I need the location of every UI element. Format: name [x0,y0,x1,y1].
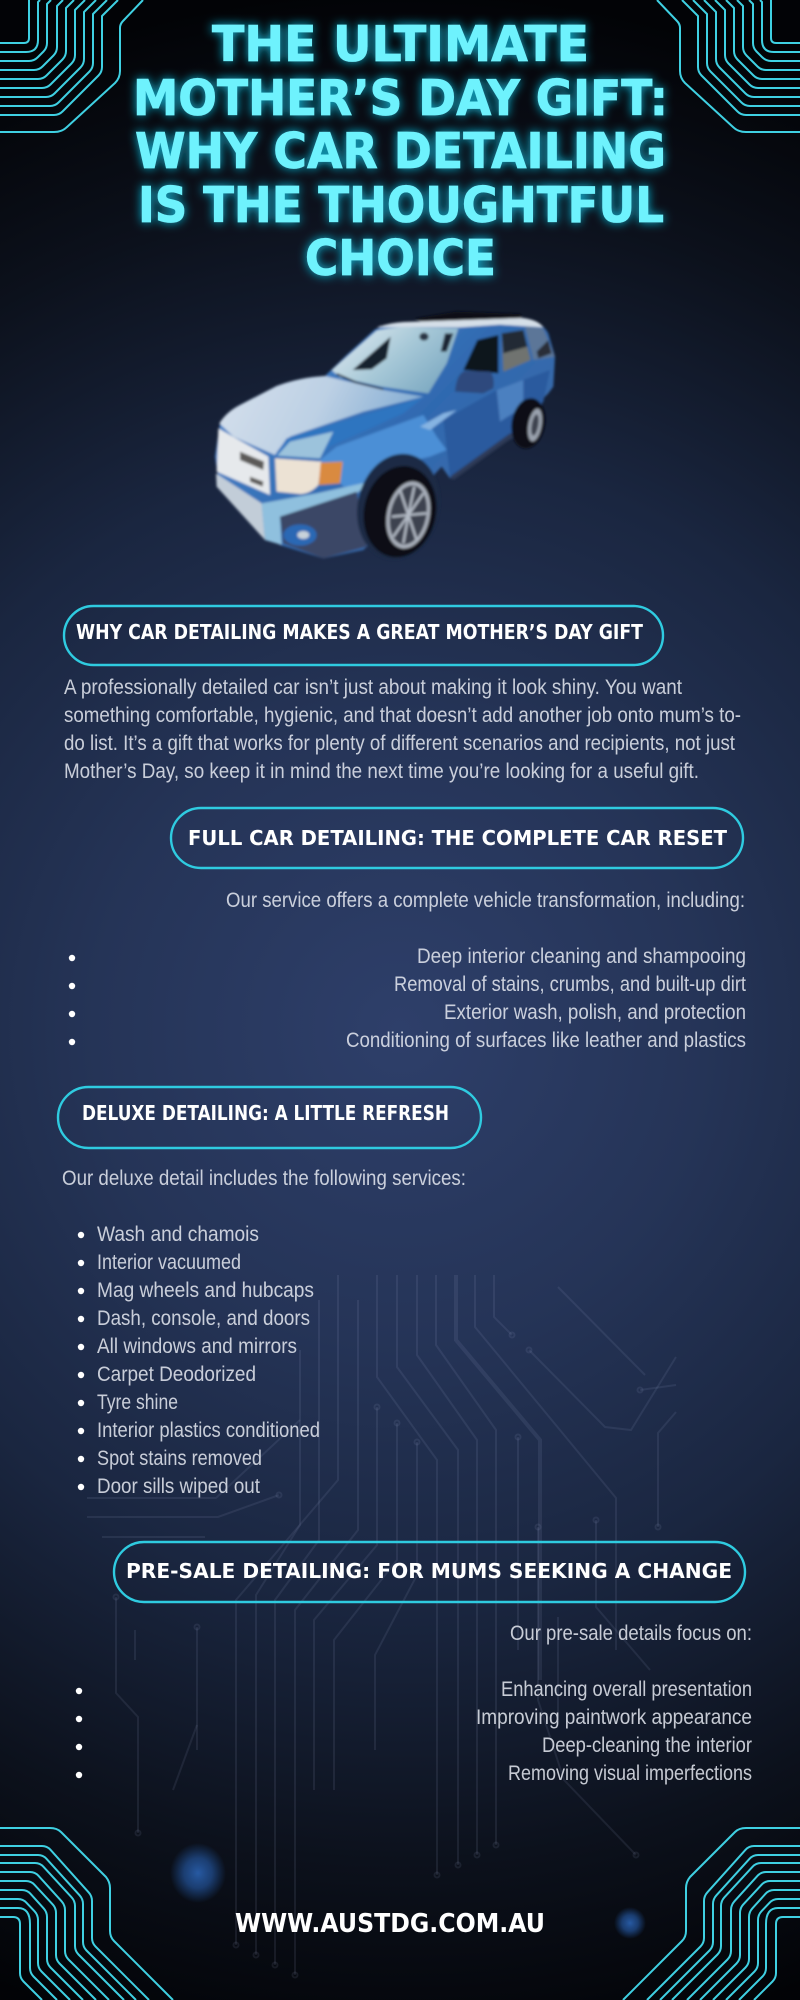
title: CHOICE [305,230,496,287]
bullet list: Tyre shine [97,1391,178,1414]
heading pill: pre-sale detailing [114,1542,745,1602]
fender [320,415,447,487]
section: why car detailing [64,606,741,783]
heading pill: deluxe detailing: DELUXE DETAILING: A LITTLE REFRESH [82,1101,449,1125]
bullet list: All windows and mirrors [97,1335,297,1358]
heading pill: why car detailing [64,606,663,665]
side windows [463,335,498,373]
grille [217,428,270,495]
glowing blue orb left [170,1843,226,1903]
heading pill: full car detailing [171,808,743,868]
circuit board background pattern [87,1275,676,1978]
section: deluxe detailing [58,1087,481,1498]
paragraph [64,676,741,783]
bullet list: Exterior wash, polish, and protection [444,1001,746,1024]
circuit corner bottom left [0,1828,173,2000]
heading pill: why car detailing: WHY CAR DETAILING MAKES A GREAT MOTHER’S DAY GIFT [76,620,643,644]
bullet list: Dash, console, and doors [97,1307,310,1330]
bullet list: Wash and chamois [97,1223,259,1246]
heading pill: deluxe detailing [58,1087,481,1148]
headlight [275,458,322,494]
paragraph: Mother’s Day, so keep it in mind the next time you’re looking for a useful gift. [64,760,699,783]
bullet list: Interior vacuumed [97,1251,241,1274]
circuit corner top left [0,0,143,132]
intro text: Our deluxe detail includes the following services: [62,1167,466,1190]
bullet list: Enhancing overall presentation [501,1678,752,1701]
section: pre-sale detailing [76,1542,752,1785]
bullet list: Deep interior cleaning and shampooing [417,945,746,968]
bullet list: Door sills wiped out [97,1475,260,1498]
title: THE ULTIMATE [212,16,589,73]
bullet list: Carpet Deodorized [97,1363,256,1386]
door side panel shade [443,370,550,477]
circuit corner bottom right [623,1828,800,2000]
section: full car detailing [69,808,746,1052]
bullet list [76,1678,752,1785]
car body [215,318,555,558]
bumper [216,473,265,540]
bullet list [69,945,746,1052]
bullet list: Spot stains removed [97,1447,262,1470]
bullet list: Conditioning of surfaces like leather and plastics [346,1029,746,1052]
website url footer: WWW.AUSTDG.COM.AU [235,1909,545,1939]
circuit corner top right [657,0,800,132]
bullet list: Mag wheels and hubcaps [97,1279,314,1302]
rear wheel [508,395,549,451]
paragraph: A professionally detailed car isn’t just about making it look shiny. You want [64,676,682,699]
title: WHY CAR DETAILING [135,123,666,180]
heading pill: full car detailing: FULL CAR DETAILING: THE COMPLETE CAR RESET [188,826,727,850]
title: IS THE THOUGHTFUL [138,177,664,234]
bullet list [78,1223,320,1498]
title [133,16,668,287]
title: MOTHER’S DAY GIFT: [133,70,668,127]
intro text: Our pre-sale details focus on: [510,1622,752,1645]
roof rack [415,312,523,323]
heading pill: pre-sale detailing: PRE-SALE DETAILING: FOR MUMS SEEKING A CHANGE [126,1559,732,1583]
bullet list: Deep-cleaning the interior [542,1734,752,1757]
front wheel [347,446,449,567]
paragraph: do list. It’s a gift that works for plenty of different scenarios and recipients, not just [64,732,735,755]
mirror [455,371,494,393]
hood [219,376,423,455]
windshield [332,327,458,393]
bullet list: Interior plastics conditioned [97,1419,320,1442]
glowing blue orb right [614,1907,646,1939]
car photo illustration [215,312,555,567]
bullet list: Removal of stains, crumbs, and built-up dirt [394,973,746,996]
intro text: Our service offers a complete vehicle transformation, including: [226,889,745,912]
paragraph: something comfortable, hygienic, and that doesn’t add another job onto mum’s to- [64,704,741,727]
bullet list: Improving paintwork appearance [476,1706,752,1729]
bullet list: Removing visual imperfections [508,1762,752,1785]
